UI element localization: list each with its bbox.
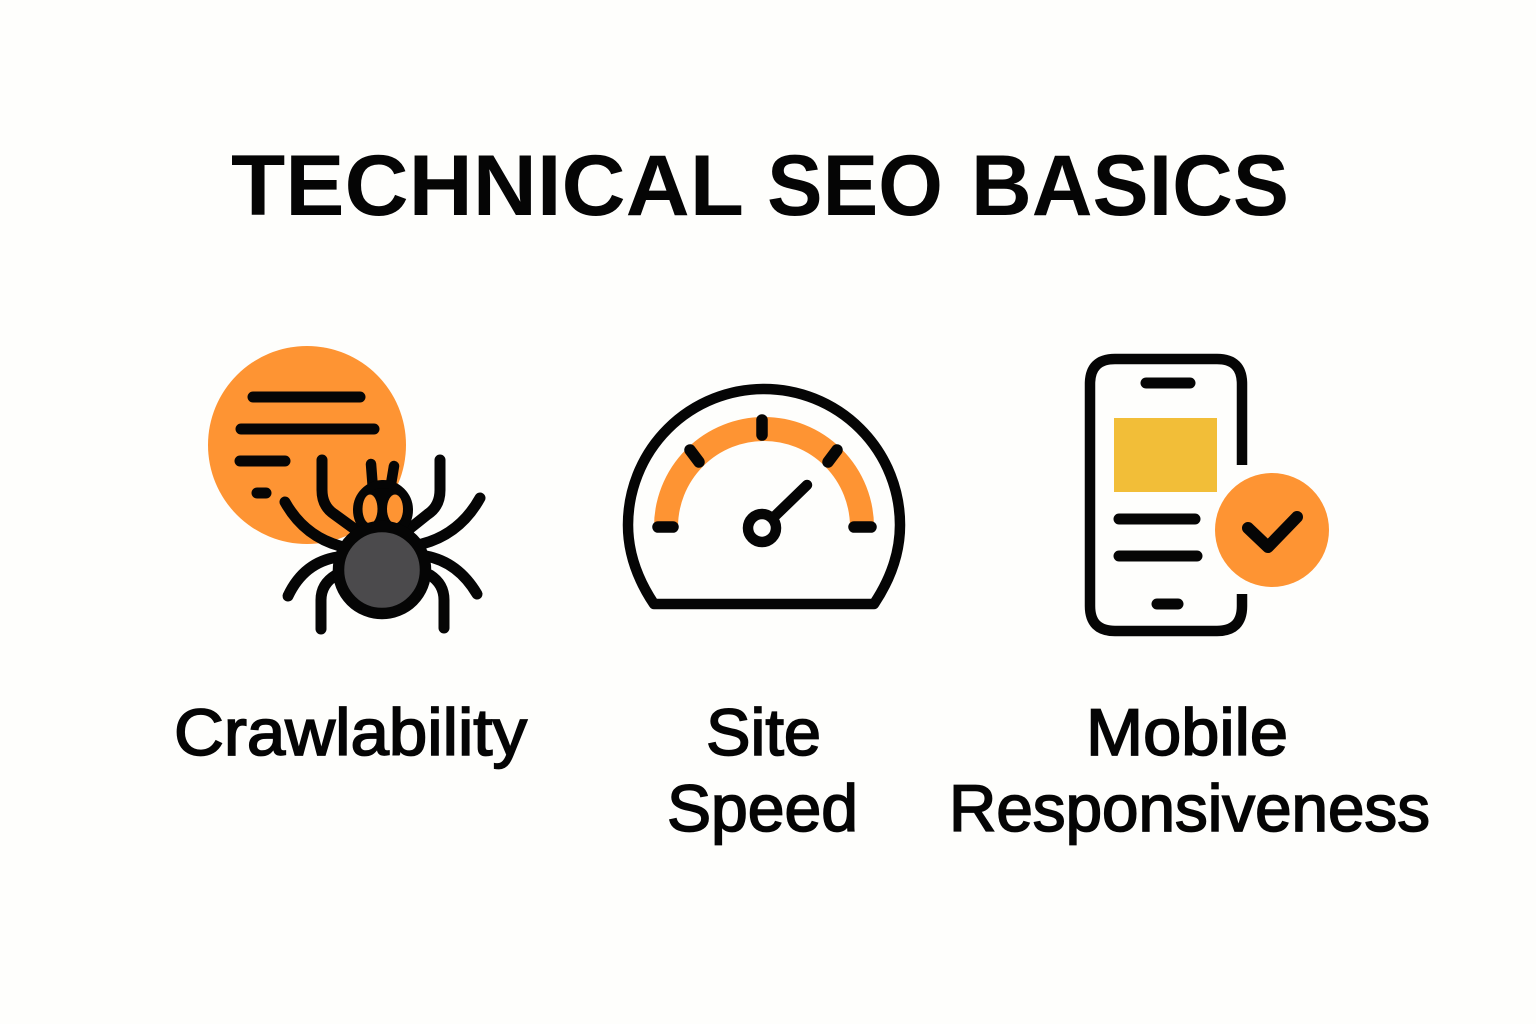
spider antennae xyxy=(371,464,394,490)
phone speaker xyxy=(1146,378,1190,388)
needle hub xyxy=(748,514,776,542)
icon: speedometer xyxy=(628,389,900,604)
panel: mobile responsiveness xyxy=(949,359,1430,845)
label: mobile responsiveness xyxy=(949,695,1430,845)
label: site speed: Speed xyxy=(667,771,858,845)
gauge ticks xyxy=(658,420,871,527)
spider legs xyxy=(285,460,480,629)
label: site speed xyxy=(667,695,858,845)
title: TECHNICAL xyxy=(231,138,744,234)
panel: site speed xyxy=(628,389,900,845)
orange circle xyxy=(208,346,406,544)
text lines xyxy=(240,397,374,493)
check badge xyxy=(1215,473,1329,587)
spider eyes xyxy=(362,494,403,524)
yellow image block xyxy=(1114,418,1217,492)
spider head xyxy=(357,484,409,536)
orange arc xyxy=(666,429,862,527)
gauge outline xyxy=(628,389,900,604)
check mark xyxy=(1248,517,1297,547)
panel: crawlability xyxy=(174,346,527,769)
label: crawlability: Crawlability xyxy=(174,695,527,769)
content lines xyxy=(1119,519,1197,556)
label: site speed: Site xyxy=(706,695,821,769)
icon: phone with check badge xyxy=(1090,359,1329,631)
phone outline xyxy=(1090,359,1242,631)
label: mobile responsiveness: Mobile xyxy=(1086,695,1288,769)
home button xyxy=(1157,598,1178,610)
title xyxy=(231,138,1289,234)
title: SEO xyxy=(767,138,943,234)
needle xyxy=(775,485,807,516)
label: mobile responsiveness: Responsiveness xyxy=(949,771,1430,845)
icon: spider on document circle xyxy=(208,346,480,629)
title: BASICS xyxy=(971,138,1289,234)
spider body xyxy=(338,526,426,614)
